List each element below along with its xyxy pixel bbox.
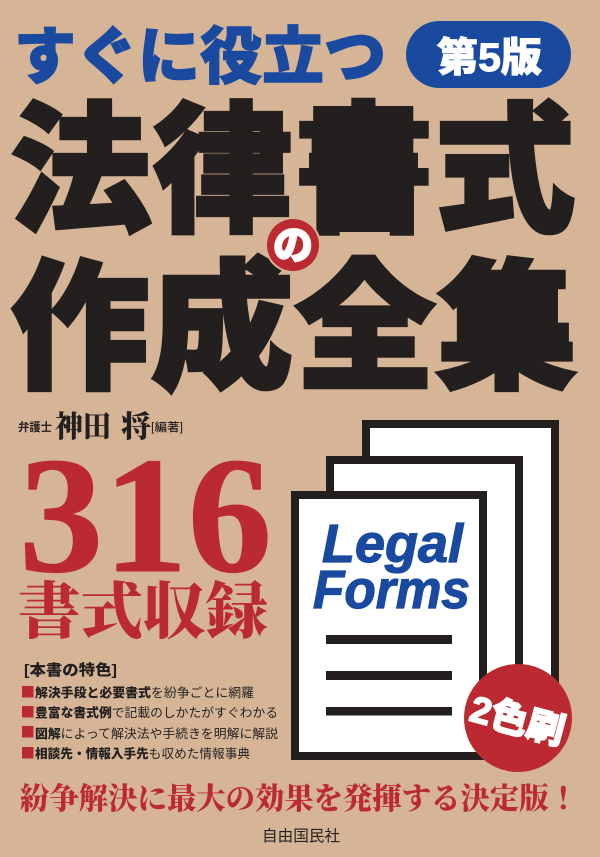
tagline: 紛争解決に最大の効果を発揮する決定版！ bbox=[20, 783, 578, 816]
two-colour print badge bbox=[464, 664, 572, 772]
main title line 2: 全 bbox=[295, 250, 435, 407]
main title line 1 bbox=[11, 93, 575, 250]
features list bbox=[22, 685, 279, 761]
legal forms heading: Legal bbox=[322, 514, 464, 574]
main title line 2 bbox=[11, 250, 577, 407]
feature 4: 相談先・情報入手先も収めた情報事典 bbox=[35, 746, 250, 761]
two-colour print badge: 2色刷 bbox=[466, 688, 569, 753]
particle no badge: の bbox=[273, 224, 313, 268]
feature 2: 豊富な書式例で記載のしかたがすぐわかる bbox=[35, 705, 278, 720]
publisher: 自由国民社 bbox=[262, 827, 340, 845]
main title line 2: 集 bbox=[437, 250, 577, 407]
author: 将 bbox=[121, 411, 151, 444]
edition badge bbox=[406, 21, 571, 88]
features heading: [本書の特色] bbox=[24, 661, 117, 679]
feature 3: 図解によって解決法や手続きを明解に解説 bbox=[35, 726, 279, 741]
subtitle: すぐに役立つ bbox=[14, 23, 386, 92]
main title line 2: 作 bbox=[11, 250, 149, 407]
particle no badge bbox=[265, 217, 321, 273]
icon: stacked documents bbox=[295, 424, 555, 756]
author: [編著] bbox=[151, 420, 183, 434]
author: 神田 bbox=[55, 411, 111, 444]
main title line 1: 書 bbox=[295, 93, 433, 250]
main title line 1: 律 bbox=[153, 93, 292, 250]
document lines bbox=[326, 635, 452, 716]
author bbox=[18, 411, 183, 444]
big number: 316 bbox=[19, 423, 272, 607]
back page bbox=[366, 424, 555, 714]
main title line 1: 式 bbox=[435, 93, 575, 250]
main title line 1: 法 bbox=[11, 93, 151, 250]
forms count label: 書式収録 bbox=[18, 579, 268, 647]
feature 1: 解決手段と必要書式 を紛争ごとに網羅 bbox=[35, 685, 254, 700]
edition badge: 第5版 bbox=[437, 36, 542, 80]
legal forms heading bbox=[313, 514, 470, 620]
legal forms heading: Forms bbox=[313, 560, 470, 620]
main title line 2: 成 bbox=[151, 250, 293, 407]
front page bbox=[295, 495, 483, 756]
middle page bbox=[330, 460, 519, 730]
author: 弁護士 bbox=[18, 420, 52, 434]
